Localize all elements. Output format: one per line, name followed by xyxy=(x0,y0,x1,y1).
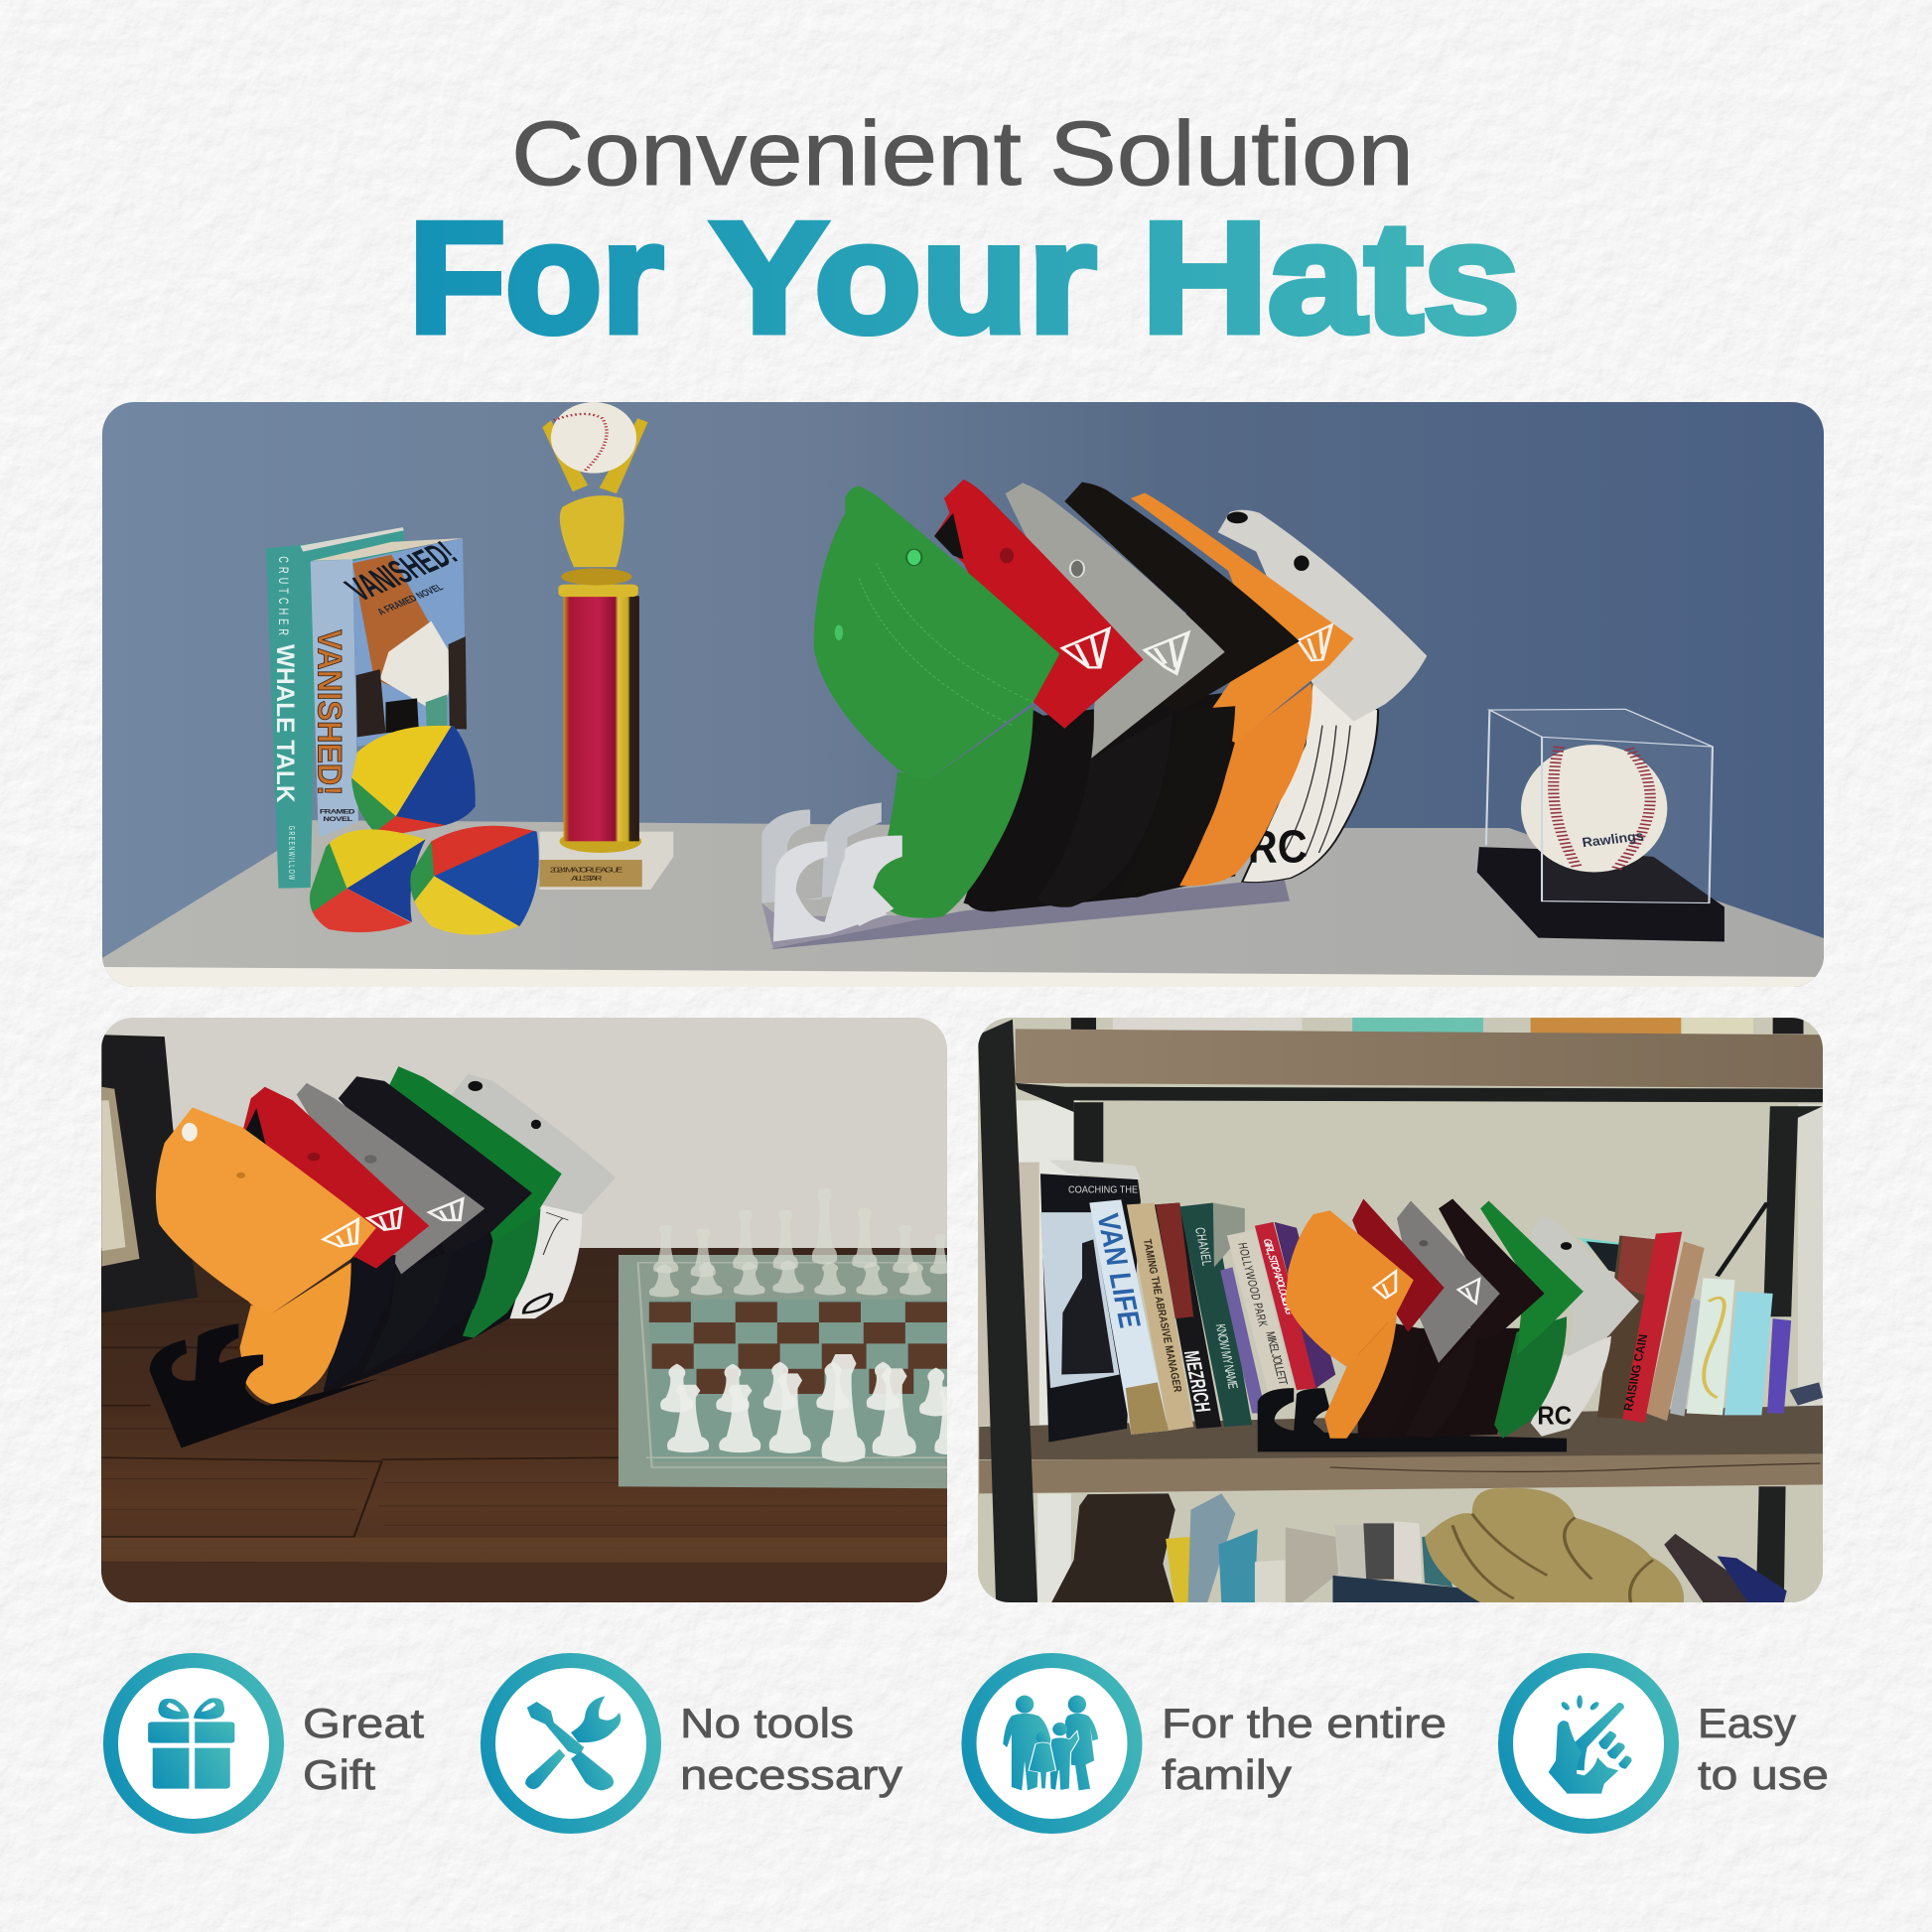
juggling ball: top xyxy=(351,725,476,834)
heading line two: Hats xyxy=(1142,191,1520,365)
hats and baseball display xyxy=(768,480,1725,949)
book: Chanel xyxy=(1179,1202,1252,1427)
book: Vanished: A FRAMED NOVEL xyxy=(375,582,446,618)
acrylic display case xyxy=(1486,709,1713,903)
heading line two: Your xyxy=(711,191,1096,365)
table grain xyxy=(101,1302,947,1549)
hat: green xyxy=(1480,1201,1584,1439)
books left group: HOLLYWOOD PARK xyxy=(1235,1242,1270,1327)
book: Hollywood Park xyxy=(1227,1230,1294,1394)
middle shelf front xyxy=(979,1453,1823,1493)
hat: orange xyxy=(1286,1210,1414,1439)
books left group xyxy=(1040,1161,1335,1443)
book: dark purple xyxy=(1275,1222,1335,1388)
book: black tall xyxy=(1040,1173,1141,1443)
icon: family xyxy=(969,1660,1135,1827)
lower shelf: right post xyxy=(1756,1486,1786,1602)
books right group xyxy=(1575,1202,1823,1423)
items on top shelf xyxy=(1071,1018,1803,1034)
straw hat xyxy=(1425,1488,1684,1602)
heading line one: Convenient Solution xyxy=(511,103,1414,205)
hat: black xyxy=(339,1076,532,1355)
hats backing shadow xyxy=(964,691,1242,911)
book: Taming xyxy=(1127,1202,1193,1431)
book: Vanished: VANISHED! xyxy=(338,535,466,609)
wall xyxy=(978,1018,1823,1602)
label xyxy=(303,1700,424,1798)
lower shelf: books xyxy=(1166,1493,1787,1602)
book: Vanished: NOVEL xyxy=(323,816,352,823)
books left group: KNOW MY NAME xyxy=(1212,1323,1239,1390)
middle shelf surface xyxy=(979,1406,1823,1459)
books left group: MEZRICH xyxy=(1179,1349,1216,1413)
book: Van Life xyxy=(1089,1199,1169,1435)
label xyxy=(1162,1700,1447,1798)
hat: black xyxy=(1439,1199,1545,1437)
side walls xyxy=(1013,1100,1079,1429)
icon: gift xyxy=(111,1660,276,1827)
top shelf board xyxy=(1016,1029,1823,1088)
panel: hats on wood table with chess set xyxy=(101,1018,960,1603)
label: family xyxy=(1162,1751,1292,1798)
label: Gift xyxy=(303,1751,375,1798)
icon: tools xyxy=(488,1660,653,1827)
shelf crack xyxy=(1330,1463,1820,1471)
label: For the entire xyxy=(1162,1700,1447,1746)
feature: for the entire family xyxy=(969,1660,1447,1827)
hat holder: black acrylic xyxy=(150,1323,379,1448)
left side objects xyxy=(978,1163,1039,1425)
book: Whale Talk xyxy=(266,527,404,889)
hat: red xyxy=(239,1087,429,1390)
books left group: VAN LIFE xyxy=(1090,1211,1148,1329)
baseball: Rawlings xyxy=(1580,829,1646,851)
hat: red xyxy=(934,480,1144,911)
label: necessary xyxy=(680,1751,902,1798)
heading line two xyxy=(409,191,1520,365)
chess board xyxy=(619,1255,947,1488)
wood table xyxy=(101,1248,947,1602)
panel: hats on bookshelf xyxy=(978,1018,1826,1602)
book: Vanished xyxy=(311,535,467,837)
hat: green xyxy=(388,1066,562,1338)
lower shelf wall xyxy=(1037,1493,1823,1602)
label: Great xyxy=(303,1700,424,1746)
book: purple xyxy=(1220,1267,1266,1413)
chess pieces: back rank xyxy=(649,1188,951,1298)
shelf top xyxy=(102,820,1824,987)
book: Whale Talk: GREENWILLOW xyxy=(287,826,295,881)
hat: white xyxy=(449,1074,616,1318)
hat: black xyxy=(1064,483,1300,897)
hat: white xyxy=(1531,1216,1639,1437)
hats backing shadow xyxy=(324,1216,535,1394)
logo xyxy=(1145,632,1188,673)
hat holder: clear acrylic xyxy=(761,802,927,949)
books left group: GIRL, STOP APOLOGIZING xyxy=(1260,1238,1296,1315)
right post xyxy=(1756,1106,1823,1602)
label: to use xyxy=(1698,1751,1829,1798)
book: Vanished: VANISHED! xyxy=(311,629,348,795)
chess pieces: front rank xyxy=(660,1354,960,1462)
feature: no tools necessary xyxy=(488,1660,902,1827)
label: No tools xyxy=(680,1700,854,1746)
wall xyxy=(102,402,1824,987)
juggling ball: bottom right xyxy=(410,826,539,935)
baseball xyxy=(1521,745,1667,872)
title xyxy=(409,103,1520,365)
holder base right xyxy=(768,878,1290,949)
books right group: RAISING CAIN xyxy=(1621,1333,1651,1412)
books left group: MIKEL JOLLETT xyxy=(1263,1331,1290,1386)
hat: grey xyxy=(1397,1201,1500,1439)
trophy: ALL STAR xyxy=(571,875,603,883)
trophy baseball xyxy=(551,402,636,474)
book: Whale Talk: CRUTCHER xyxy=(276,556,291,635)
hat: white: RC xyxy=(1537,1401,1572,1430)
panel: hats on white shelf xyxy=(102,402,1824,987)
label: Easy xyxy=(1698,1700,1796,1746)
straw hat folds xyxy=(1452,1514,1653,1602)
table front plank xyxy=(101,1563,947,1603)
lower shelf: sculpture xyxy=(1051,1493,1175,1602)
trophy: 2024 MAJOR LEAGUE xyxy=(550,866,622,874)
label xyxy=(1698,1700,1829,1798)
hat: orange xyxy=(1131,492,1354,886)
trophy xyxy=(539,402,673,890)
hat: white: RC xyxy=(1248,821,1308,873)
top shelf rail xyxy=(1016,1083,1823,1112)
book: Mezrich xyxy=(1155,1202,1221,1429)
label xyxy=(680,1700,902,1798)
hat: white xyxy=(1218,510,1427,883)
hat: red xyxy=(1352,1199,1445,1439)
books left group: COACHING THE xyxy=(1068,1184,1138,1195)
book: Vanished: FRAMED xyxy=(320,808,355,815)
book: Whale Talk: WHALE TALK xyxy=(271,644,300,803)
hat: grey xyxy=(297,1083,484,1375)
left objects xyxy=(266,402,984,949)
baseball display base xyxy=(1477,847,1725,941)
wall xyxy=(101,1018,947,1276)
shelf front edge xyxy=(102,967,1824,987)
heading line two: For xyxy=(409,191,663,365)
table planks xyxy=(101,1347,947,1566)
books left group: CHANEL xyxy=(1191,1227,1213,1267)
feature: easy to use xyxy=(1505,1660,1829,1827)
logo xyxy=(1062,628,1109,667)
juggling ball: bottom left xyxy=(310,829,425,933)
hats backing shadow xyxy=(1358,1328,1525,1439)
left post xyxy=(978,1020,1037,1602)
back post xyxy=(1074,1102,1103,1163)
hat: orange xyxy=(156,1107,376,1406)
books left group: TAMING THE ABRASIVE MANAGER xyxy=(1140,1239,1183,1393)
picture frame xyxy=(101,1035,198,1312)
icon: finger snap xyxy=(1505,1660,1672,1827)
hat holder front fins xyxy=(842,836,902,926)
hat: green xyxy=(814,485,1059,918)
lower left wall xyxy=(1037,1493,1071,1602)
feature: great gift xyxy=(111,1660,424,1827)
book: Rachel Hollis xyxy=(1255,1222,1317,1390)
hat holder: black xyxy=(1258,1388,1567,1451)
hat: grey xyxy=(1006,483,1225,907)
